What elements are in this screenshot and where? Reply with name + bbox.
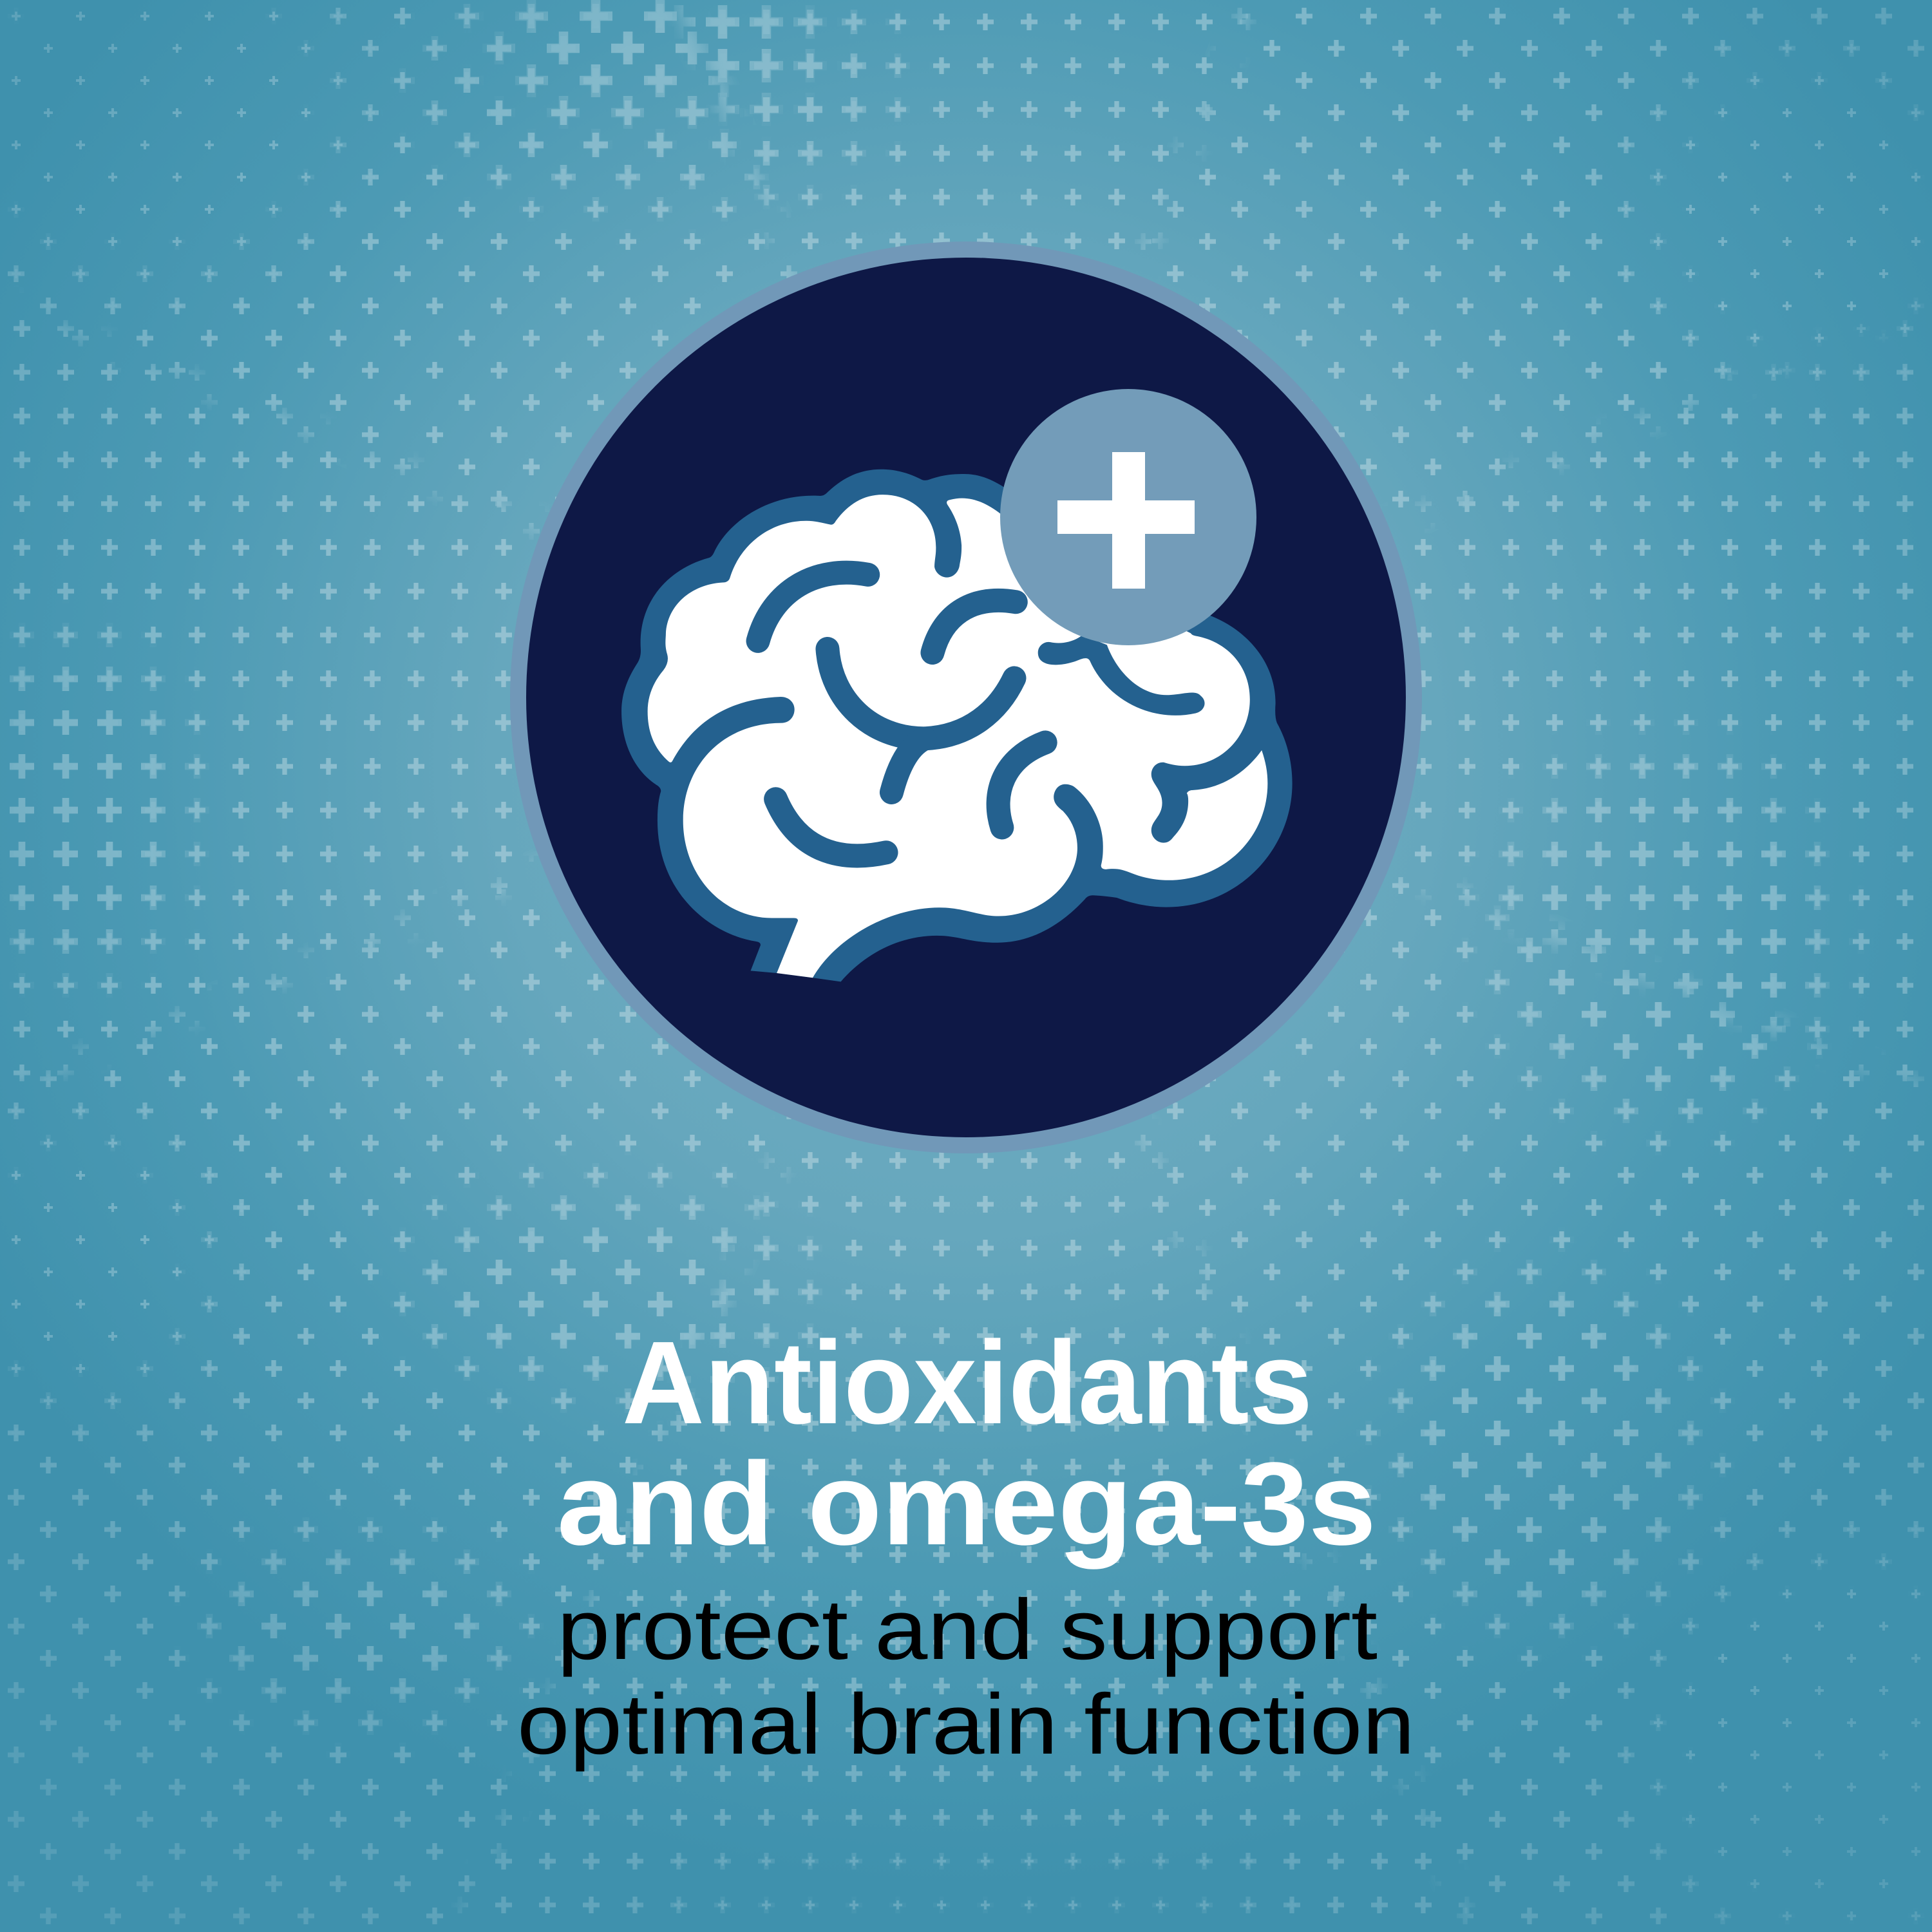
circle navy disc xyxy=(526,258,1406,1137)
circle outer ring xyxy=(510,242,1422,1153)
subheading xyxy=(517,1582,1415,1772)
heading xyxy=(557,1316,1376,1569)
heading line 2: and omega-3s xyxy=(557,1437,1376,1569)
heading line 1: Antioxidants xyxy=(622,1316,1312,1448)
subheading line 2: optimal brain function xyxy=(517,1677,1415,1772)
icon: white plus xyxy=(1057,452,1195,589)
icon: brain xyxy=(621,469,1293,981)
icon: plus badge circle xyxy=(1000,389,1256,645)
brain outline xyxy=(621,469,1293,981)
brain fold lines xyxy=(758,573,1045,856)
subheading line 1: protect and support xyxy=(557,1582,1378,1678)
brain right fold xyxy=(1038,635,1205,715)
brain white fill xyxy=(648,495,1267,978)
panel: central circle badge xyxy=(510,242,1422,1153)
